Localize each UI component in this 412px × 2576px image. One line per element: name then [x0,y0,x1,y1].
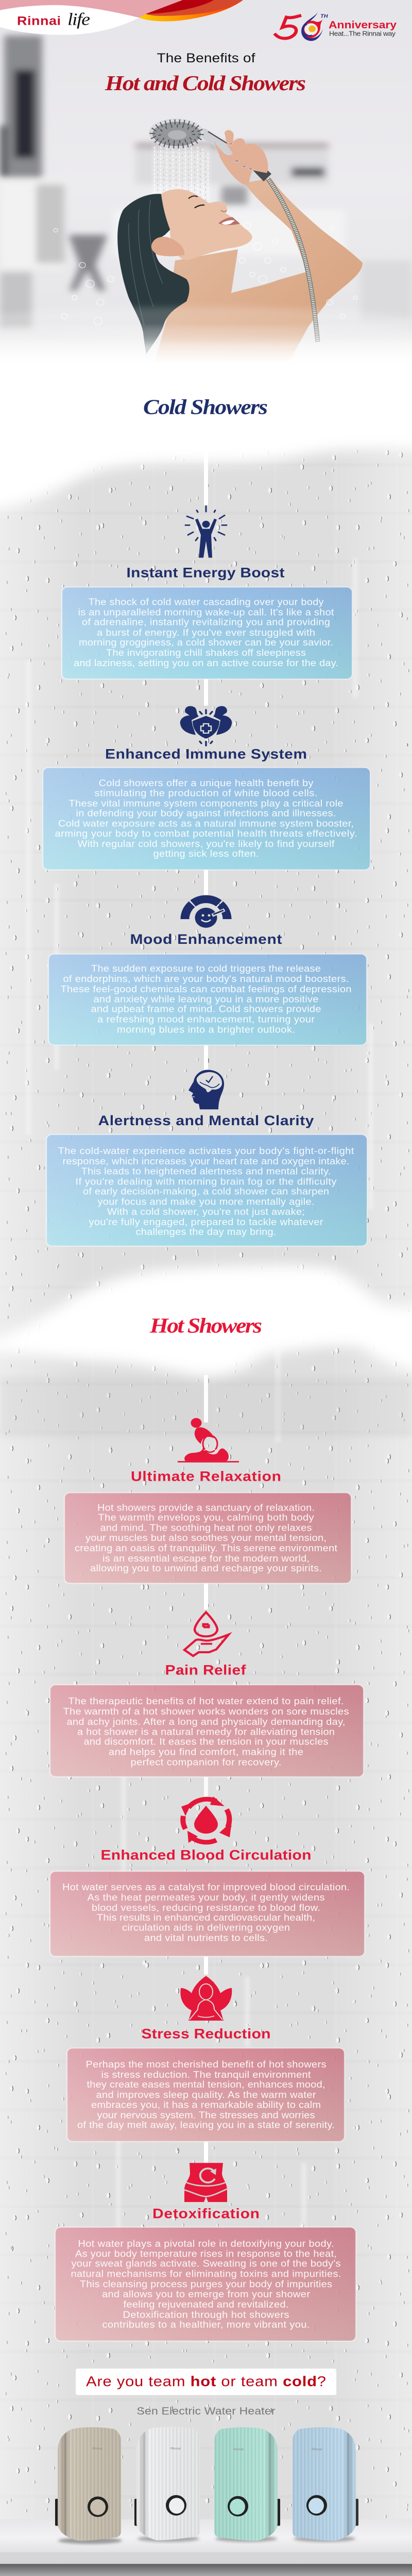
card: enhanced immune system: Cold showers offer a unique health benefit by [99,778,314,789]
card: enhanced blood circulation [50,1871,365,1956]
heading: stress reduction: Stress Reduction [141,2026,270,2042]
card: stress reduction: and improves sleep quality. As the warm water [96,2090,316,2100]
card: ultimate relaxation [64,1493,351,1583]
card: alertness and mental clarity: your focus and make you more mentally agile. [98,1197,314,1207]
logo: 50th anniversary: Anniversary [329,19,397,31]
hand [214,130,268,186]
card: ultimate relaxation: The warmth envelops you, calming both body [98,1513,314,1523]
icon: relaxing woman with towel [178,1418,239,1463]
card: pain relief: The warmth of a hot shower works wonders on sore muscles [63,1707,349,1717]
card: stress reduction: is stress reduction. The tranquil environment [101,2070,311,2080]
icon: energetic person [185,506,227,558]
card: ultimate relaxation: and mind. The soothing heat not only relaxes [100,1523,312,1533]
heading: cold showers: Cold Showers [143,396,268,419]
card: instant energy boost: The invigorating chill shakes off sleepiness [106,648,306,658]
card: detoxification: natural mechanisms for eliminating toxins and impurities. [71,2269,341,2279]
card: pain relief: and achy joints. After a long and physically demanding day, [66,1717,345,1727]
icon: meditation with lotus [180,1976,232,2021]
card: instant energy boost [62,587,352,679]
shower handle [203,133,256,166]
heading: mood enhancement: Mood Enhancement [130,931,282,947]
heater: mint: Rinnai [233,2448,244,2451]
card: pain relief: perfect companion for recovery. [130,1757,281,1768]
card: alertness and mental clarity: response, which increases your heart rate and oxygen intake. [62,1157,350,1167]
card: detoxification: Hot water plays a pivotal role in detoxifying your body. [78,2239,334,2249]
heading: ultimate relaxation: Ultimate Relaxation [131,1469,281,1484]
blurred bathroom background [0,36,412,328]
heading: hot showers: Hot Showers [149,1314,262,1337]
card: alertness and mental clarity: If you're dealing with morning brain fog or the difficulty [75,1177,337,1187]
card: enhanced blood circulation: As the heat permeates your body, it gently widens [87,1893,324,1903]
card: ultimate relaxation: Hot showers provide a sanctuary of relaxation. [97,1503,315,1513]
card: alertness and mental clarity: you're fully engaged, prepared to tackle whatever [89,1217,323,1228]
logo: 50th anniversary [274,10,397,41]
card: mood enhancement: and anxiety while leaving you in a more positive [94,994,318,1005]
face and neck [161,189,252,260]
logo: 50th anniversary: TH [320,14,328,19]
icon: head with brain [188,1070,224,1109]
card: enhanced immune system [43,768,370,870]
card: enhanced immune system: With regular cold showers, you're likely to find yourself [77,839,335,850]
card: detoxification: Detoxification through hot showers [123,2310,289,2320]
card: mood enhancement: The sudden exposure to cold triggers the release [91,964,321,974]
card: stress reduction: they create eases mental tension, enhances mood, [87,2080,325,2090]
card: enhanced immune system: in defending your body against infections and illnesses. [76,808,336,819]
card: alertness and mental clarity: With a cold shower, you're not just awake; [107,1207,305,1217]
card: enhanced immune system: stimulating the production of white blood cells. [95,789,317,799]
card: enhanced blood circulation: This results in enhanced cardiovascular health, [97,1913,315,1923]
product label: Sen Electric Water Heater [137,2405,275,2417]
card: mood enhancement: These feel-good chemicals can combat feelings of depression [60,985,352,995]
card: ultimate relaxation: allowing you to unwind and recharge your spirits. [90,1564,322,1574]
card: detoxification: As your body temperature rises in response to the heat, [75,2249,337,2259]
card: detoxification: feeling rejuvenated and revitalized. [123,2300,289,2310]
heading: instant energy boost: Instant Energy Boost [126,565,285,581]
heater: blue [293,2427,358,2540]
card: stress reduction: of the day melt away, leaving you in a state of serenity. [77,2120,335,2130]
icon: blood circulation [181,1797,232,1843]
card: pain relief: The therapeutic benefits of hot water extend to pain relief. [68,1697,344,1707]
card: enhanced blood circulation: circulation aids in delivering oxygen [122,1923,290,1933]
shelf [0,2519,412,2576]
falling water [152,145,210,207]
title: The Benefits of [157,50,255,65]
ear [151,237,184,256]
card: instant energy boost: and laziness, setting you on an active course for the day. [74,658,338,669]
card: enhanced blood circulation: blood vessels, reducing resistance to blood flow. [92,1903,320,1913]
card: stress reduction [67,2048,345,2142]
logo: Rinnai life [17,9,90,29]
heater: blue: Rinnai [312,2448,322,2451]
card: alertness and mental clarity: This leads to heightened alertness and mental clarity. [81,1167,331,1177]
facial features [188,196,240,225]
card: enhanced blood circulation: Hot water serves as a catalyst for improved blood circulation. [62,1883,350,1893]
card: ultimate relaxation: your muscles but also soothes your mental tension, [85,1533,327,1544]
icon: blood drop in hand [184,1612,229,1656]
card: ultimate relaxation: is an essential escape for the modern world, [102,1554,310,1564]
card: detoxification: your sweat glands activate. Sweating is one of the body's [72,2259,341,2269]
card: instant energy boost: a burst of energy. If you've ever struggled with [97,628,315,638]
logo: Rinnai life: Rinnai [17,14,61,28]
products: sen electric water heaters [55,2427,358,2544]
icon: happy mood gauge [185,899,227,929]
heater: white [134,2427,200,2540]
title: Hot and Cold Showers [105,72,306,95]
card: ultimate relaxation: creating an oasis of tranquility. This serene environment [75,1544,338,1554]
section: hot showers [50,1314,365,2341]
white steam fade below the hero [0,307,412,512]
heater: beige: Rinnai [92,2447,102,2450]
card: stress reduction: Perhaps the most cherished benefit of hot showers [85,2060,326,2070]
hero photo: woman showering in a bathroom [0,0,412,372]
callout: are you team hot or team cold [76,2368,336,2395]
card: enhanced immune system: arming your body to combat potential health threats effectively. [55,829,357,839]
card: detoxification: This cleansing process purges your body of impurities [80,2279,332,2290]
logo: 50th anniversary: Heat...The Rinnai way [329,30,396,37]
card: alertness and mental clarity: challenges the day may bring. [136,1227,276,1238]
card: pain relief: and helps you find comfort, making it the [109,1747,303,1757]
card: alertness and mental clarity: of early decision-making, a cold shower can sharpen [83,1187,329,1197]
card: mood enhancement: a refreshing mood enhancement, turning your [97,1014,315,1025]
card: stress reduction: embraces you, it has a remarkable ability to calm [91,2100,321,2110]
card: mood enhancement [48,954,367,1045]
top brand swoosh [0,0,243,35]
card: detoxification: and allows you to emerge from your shower [102,2290,311,2300]
card: instant energy boost: morning grogginess, a cold shower can be your savior. [79,638,333,648]
section: cold showers [43,396,370,1246]
logo: Rinnai life: life [67,9,90,29]
body and arm [154,178,363,363]
card: enhanced immune system: getting sick less often. [153,849,259,859]
heading: detoxification: Detoxification [152,2206,260,2222]
icon: muscle arms and shield [180,706,232,745]
card: pain relief: a hot shower is a natural remedy for alleviating tension [77,1727,335,1737]
card: enhanced immune system: These vital immune system components play a critical role [68,799,343,809]
card: pain relief [50,1685,364,1777]
title [105,50,306,95]
shower head [149,118,203,147]
heater: mint [214,2427,280,2540]
card: alertness and mental clarity [46,1134,367,1246]
card: detoxification: contributes to a healthier, more vibrant you. [102,2320,310,2330]
heater: white: Rinnai [170,2447,181,2450]
card: detoxification [55,2227,356,2341]
card: instant energy boost: The shock of cold water cascading over your body [88,597,324,607]
card: enhanced immune system: Cold water exposure acts as a natural immune system booster, [58,819,354,829]
shower hose [268,179,318,342]
card: stress reduction: your nervous system. The stresses and worries [97,2110,315,2121]
callout: are you team hot or team cold: Are you team hot or team cold? [86,2374,326,2389]
hair [117,194,190,354]
connector lines: cold [204,439,208,1070]
card: enhanced blood circulation: and vital nutrients to cells. [144,1933,268,1943]
heading: enhanced immune system: Enhanced Immune System [105,747,307,762]
heading: enhanced blood circulation: Enhanced Blood Circulation [101,1848,311,1863]
card: mood enhancement: of endorphins, which are your body's natural mood boosters. [63,974,349,985]
icon: detox torso [184,2163,227,2202]
card: mood enhancement: and upbeat frame of mind. Cold showers provide [91,1004,321,1014]
steam cloud behind hot showers heading [0,1265,412,1376]
heading: pain relief: Pain Relief [165,1663,246,1678]
card: instant energy boost: of adrenaline, instantly revitalizing you and providing [82,617,330,628]
bubbles [54,223,357,325]
connector lines: hot [204,1375,208,2163]
card: instant energy boost: is an unparalleled morning wake-up call. It's like a shot [78,607,334,618]
card: alertness and mental clarity: The cold-water experience activates your body's fight-or-flight [58,1146,354,1157]
heading: alertness and mental clarity: Alertness and Mental Clarity [98,1113,314,1129]
heater: beige [55,2427,121,2540]
card: pain relief: and discomfort. It eases the tension in your muscles [83,1737,329,1747]
card: mood enhancement: morning blues into a brighter outlook. [117,1025,295,1035]
